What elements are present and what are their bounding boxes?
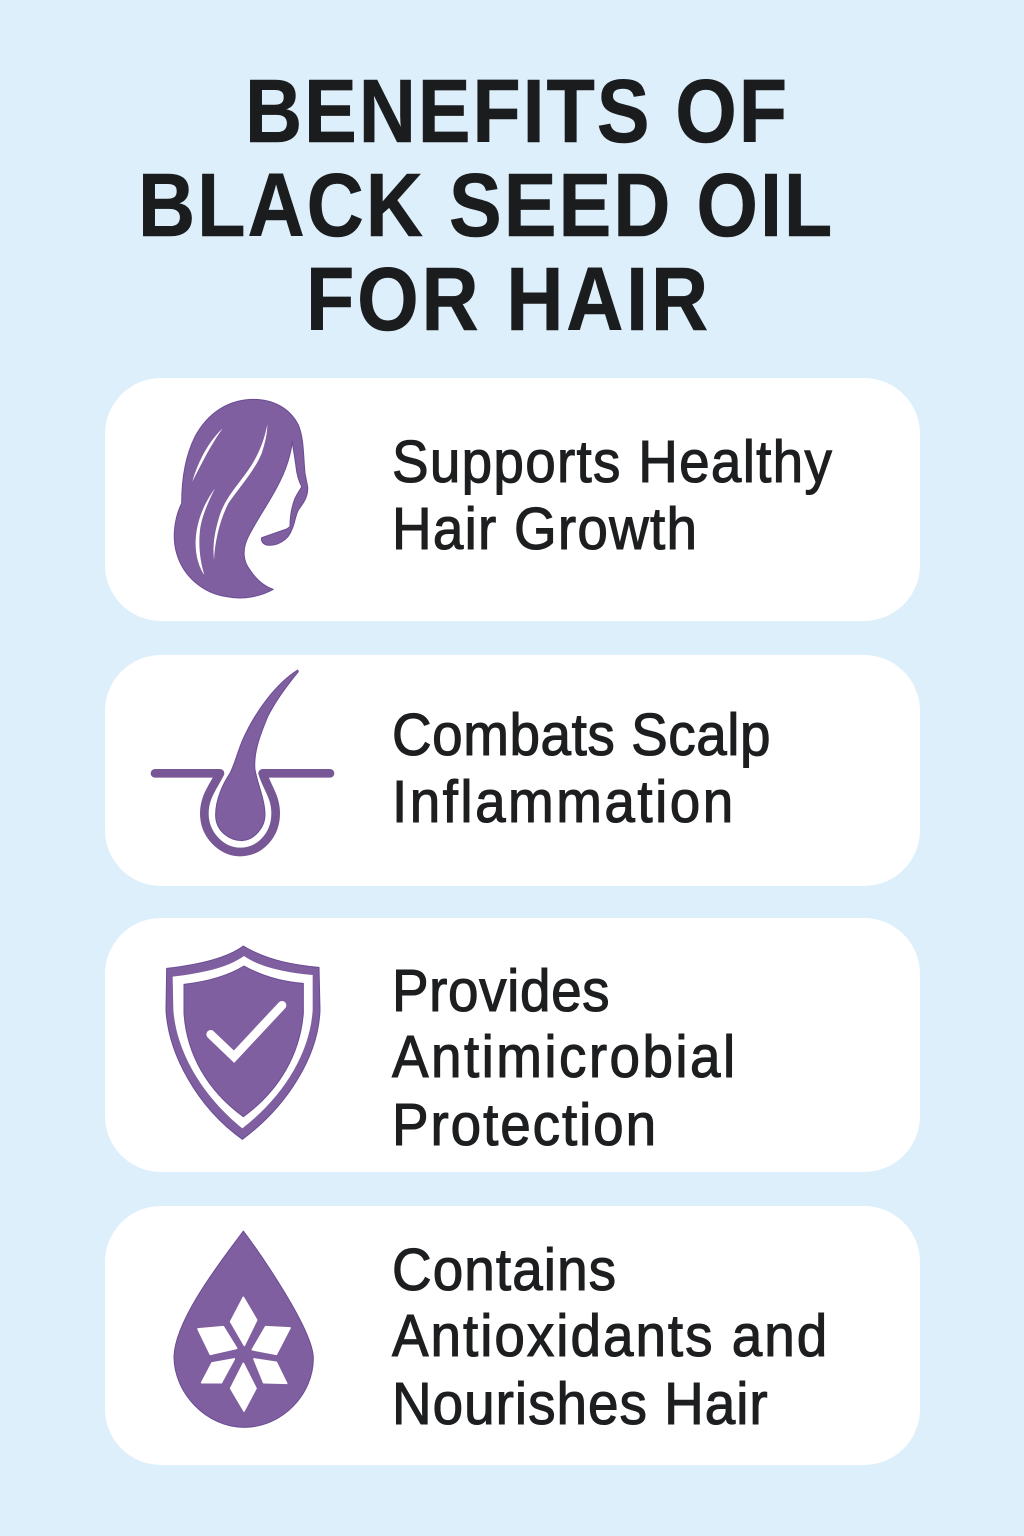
text: provides antimicrobial protection [392, 958, 735, 1158]
icon: shield with check [166, 946, 320, 1139]
text: supports healthy hair growth [392, 429, 832, 562]
title: FOR HAIR [306, 248, 708, 349]
title: BLACK SEED OIL [138, 154, 832, 255]
panel: antioxidants [105, 1206, 920, 1465]
panel: healthy hair growth [105, 378, 920, 621]
title [138, 60, 832, 349]
text: contains antioxidants and nourishes hair: Nourishes Hair [392, 1371, 768, 1437]
panel: scalp inflammation [105, 655, 920, 886]
text: provides antimicrobial protection: Provides [392, 958, 610, 1024]
text: contains antioxidants and nourishes hair [392, 1237, 827, 1437]
title: BENEFITS OF [245, 60, 787, 161]
text: contains antioxidants and nourishes hair: Contains [392, 1237, 616, 1303]
text: provides antimicrobial protection: Antimicrobial [392, 1024, 735, 1090]
text: supports healthy hair growth: Supports Healthy [392, 429, 832, 495]
icon: hair [174, 399, 308, 598]
icon: oil drop with flower [174, 1231, 313, 1427]
text: combats scalp inflammation: Combats Scalp [392, 702, 771, 768]
text: combats scalp inflammation [392, 702, 771, 835]
icon: hair follicle [155, 670, 330, 852]
text: supports healthy hair growth: Hair Growth [392, 496, 697, 562]
text: combats scalp inflammation: Inflammation [392, 769, 733, 835]
text: provides antimicrobial protection: Protection [392, 1092, 656, 1158]
text: contains antioxidants and nourishes hair: Antioxidants and [392, 1303, 827, 1369]
panel: antimicrobial protection [105, 918, 920, 1172]
